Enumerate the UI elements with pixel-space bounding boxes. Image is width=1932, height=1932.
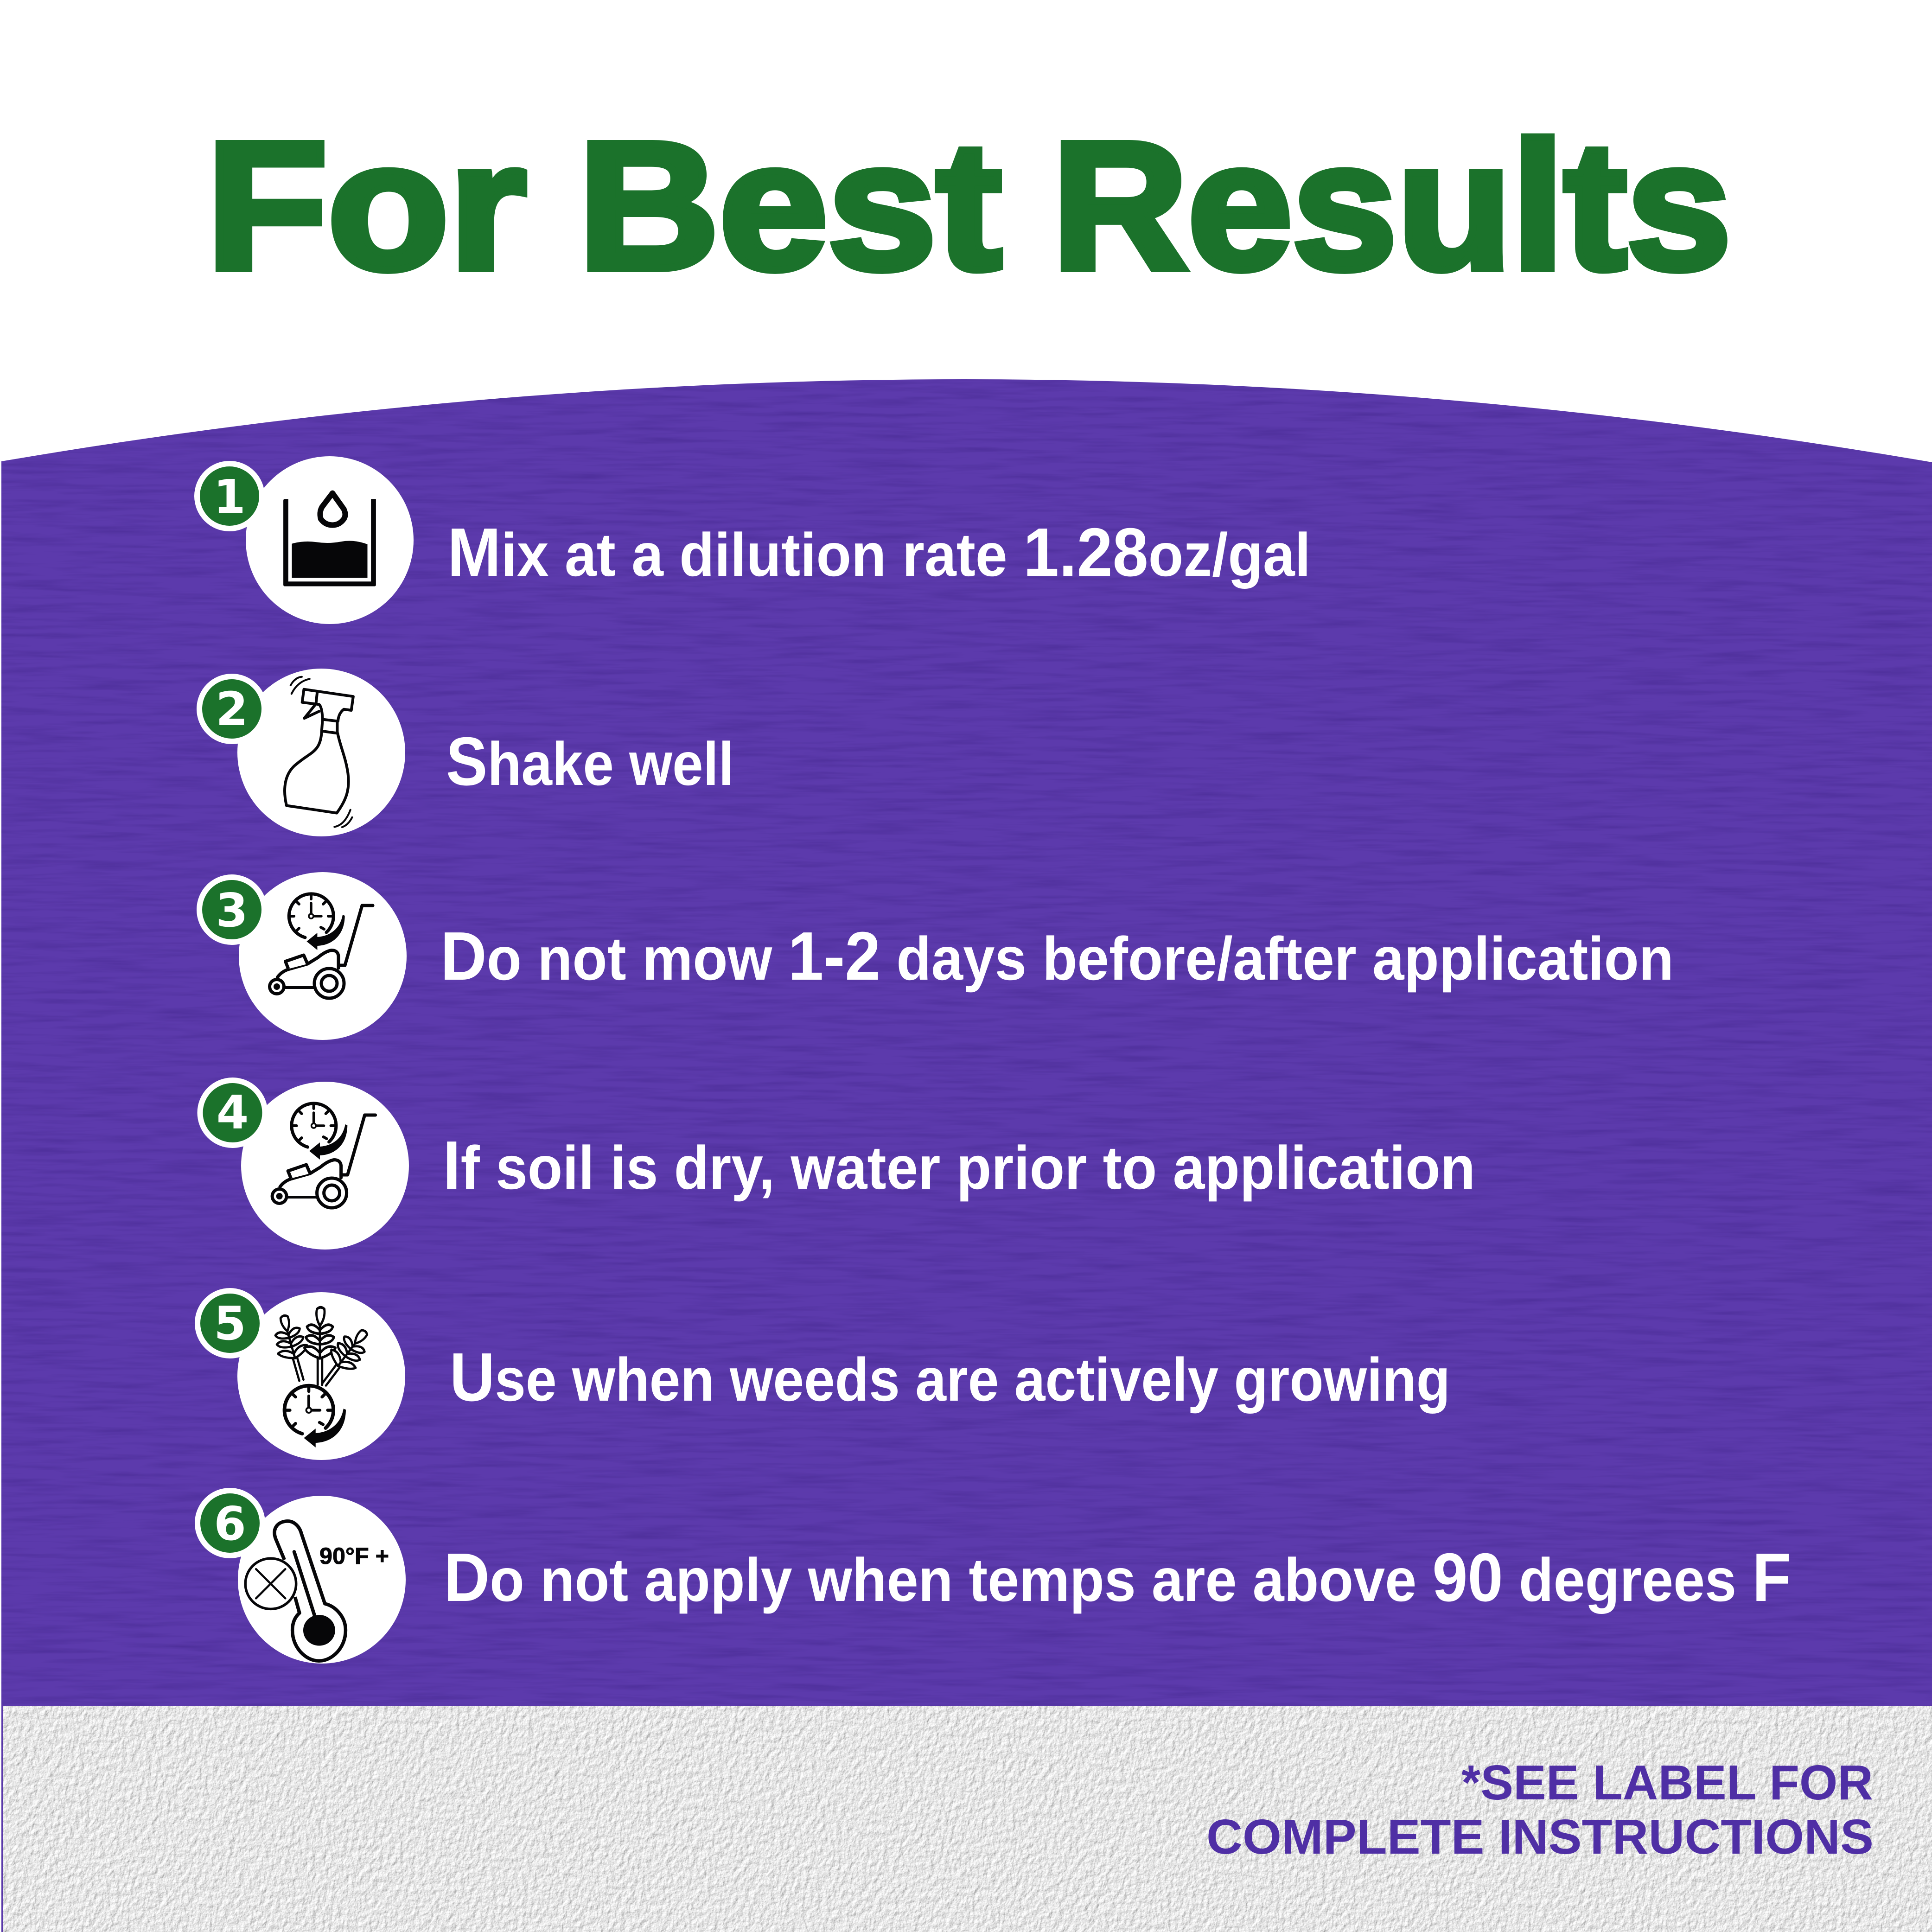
footer note: COMPLETE INSTRUCTIONS [1206,1810,1874,1864]
step 4 [198,1078,1475,1250]
badge 6: 6 [214,1497,246,1551]
panel: textured grey footer [3,1706,1932,1932]
temperature label: 90°F + [319,1543,389,1569]
step 6 [195,1488,1791,1664]
badge 4 [198,1078,268,1148]
icon circle 5 [237,1292,405,1460]
icon circle 6 [238,1496,406,1664]
badge 5 [195,1288,265,1358]
instruction 1: Mix at a dilution rate 1.28oz/gal [447,514,1311,591]
badge 2: 2 [216,682,248,736]
step 2 [197,669,734,836]
icon: clock and lawn mower [268,894,373,998]
instruction 4: If soil is dry, water prior to application [443,1127,1475,1204]
instruction 3: Do not mow 1-2 days before/after application [440,918,1674,995]
icon circle 3 [239,872,407,1040]
instruction 5: Use when weeds are actively growing [450,1339,1450,1416]
badge 5: 5 [214,1296,246,1351]
step 3 [197,872,1674,1040]
icon: thermometer with crossed circle [245,1521,345,1661]
badge 3: 3 [216,883,248,937]
title: For [206,104,526,307]
icon circle 4 [241,1082,409,1250]
instruction 6: Do not apply when temps are above 90 degrees F [444,1539,1791,1616]
title [206,104,1731,307]
icon circle 1 [246,456,414,624]
icon circle 2 [237,669,405,836]
badge 1 [194,461,265,531]
icon: three weeds above clock [268,1307,376,1447]
step 1 [194,456,1311,624]
badge 1: 1 [213,470,246,524]
icon: water drop in tank [283,493,376,587]
footer note: *SEE LABEL FOR [1461,1755,1873,1810]
badge 4: 4 [217,1085,249,1140]
step 5 [195,1288,1450,1460]
instruction 2: Shake well [446,723,734,800]
title: Best [578,104,1001,307]
icon: spray bottle [285,677,353,827]
title: Results [1052,104,1731,307]
badge 2 [197,674,267,744]
badge 6 [195,1488,265,1558]
footer note [1206,1755,1874,1864]
badge 3 [197,874,267,945]
icon: clock and lawn mower [271,1103,376,1208]
